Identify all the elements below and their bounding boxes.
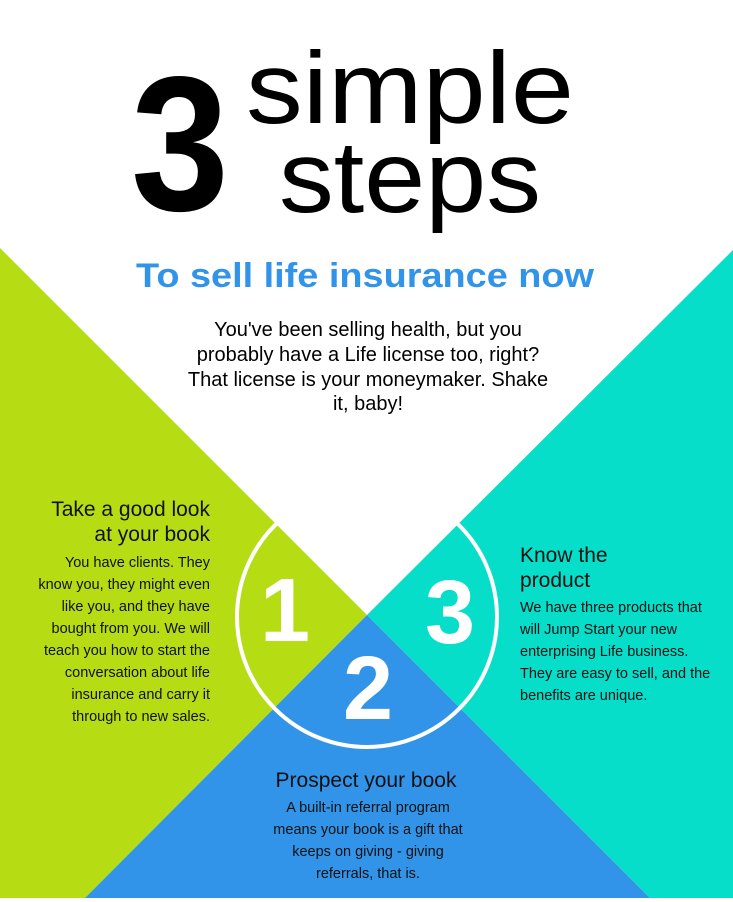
- step 2 text: Prospect your book: [276, 769, 457, 792]
- title: steps: [279, 120, 541, 234]
- panel: green left region: [0, 248, 367, 898]
- step 3 text: enterprising Life business.: [520, 644, 688, 660]
- step 1 text: bought from you. We will: [52, 621, 210, 637]
- title: simple: [246, 31, 574, 145]
- step 1 text: insurance and carry it: [71, 687, 210, 703]
- step 2 text: [273, 769, 463, 882]
- step 3 text: [519, 544, 710, 704]
- circle ring: [237, 487, 497, 747]
- intro text: That license is your moneymaker. Shake: [188, 369, 548, 391]
- intro text: it, baby!: [333, 393, 403, 415]
- step 2 text: keeps on giving - giving: [292, 844, 444, 860]
- intro text: You've been selling health, but you: [214, 319, 522, 341]
- step 1 text: at your book: [94, 523, 210, 546]
- step 2 text: A built-in referral program: [286, 800, 450, 816]
- title: [131, 31, 574, 251]
- step 1 text: through to new sales.: [72, 709, 210, 725]
- step 3 text: product: [520, 569, 590, 592]
- intro text: probably have a Life license too, right?: [197, 344, 539, 366]
- step 3 text: Know the: [520, 544, 608, 567]
- step 1 text: like you, and they have: [62, 599, 210, 615]
- panel: teal right region: [367, 250, 733, 898]
- step 1 text: teach you how to start the: [44, 643, 210, 659]
- step 1 text: [38, 498, 211, 725]
- intro text: [188, 319, 548, 415]
- step 1 text: Take a good look: [51, 498, 210, 521]
- subtitle: To sell life insurance now: [136, 257, 595, 295]
- title: 3: [131, 36, 229, 251]
- step 3 text: They are easy to sell, and the: [520, 666, 710, 682]
- step 2 text: means your book is a gift that: [273, 822, 463, 838]
- step 3 text: benefits are unique.: [520, 688, 647, 704]
- number 1: 1: [260, 561, 310, 661]
- step 1 text: conversation about life: [65, 665, 210, 681]
- step 3 text: We have three products that: [520, 600, 702, 616]
- step 1 text: You have clients. They: [65, 555, 211, 571]
- step 1 text: know you, they might even: [38, 577, 210, 593]
- step 2 text: referrals, that is.: [316, 866, 420, 882]
- panel: blue bottom region: [85, 615, 650, 898]
- number 2: 2: [343, 639, 393, 739]
- step 3 text: will Jump Start your new: [519, 622, 678, 638]
- number 3: 3: [425, 563, 475, 663]
